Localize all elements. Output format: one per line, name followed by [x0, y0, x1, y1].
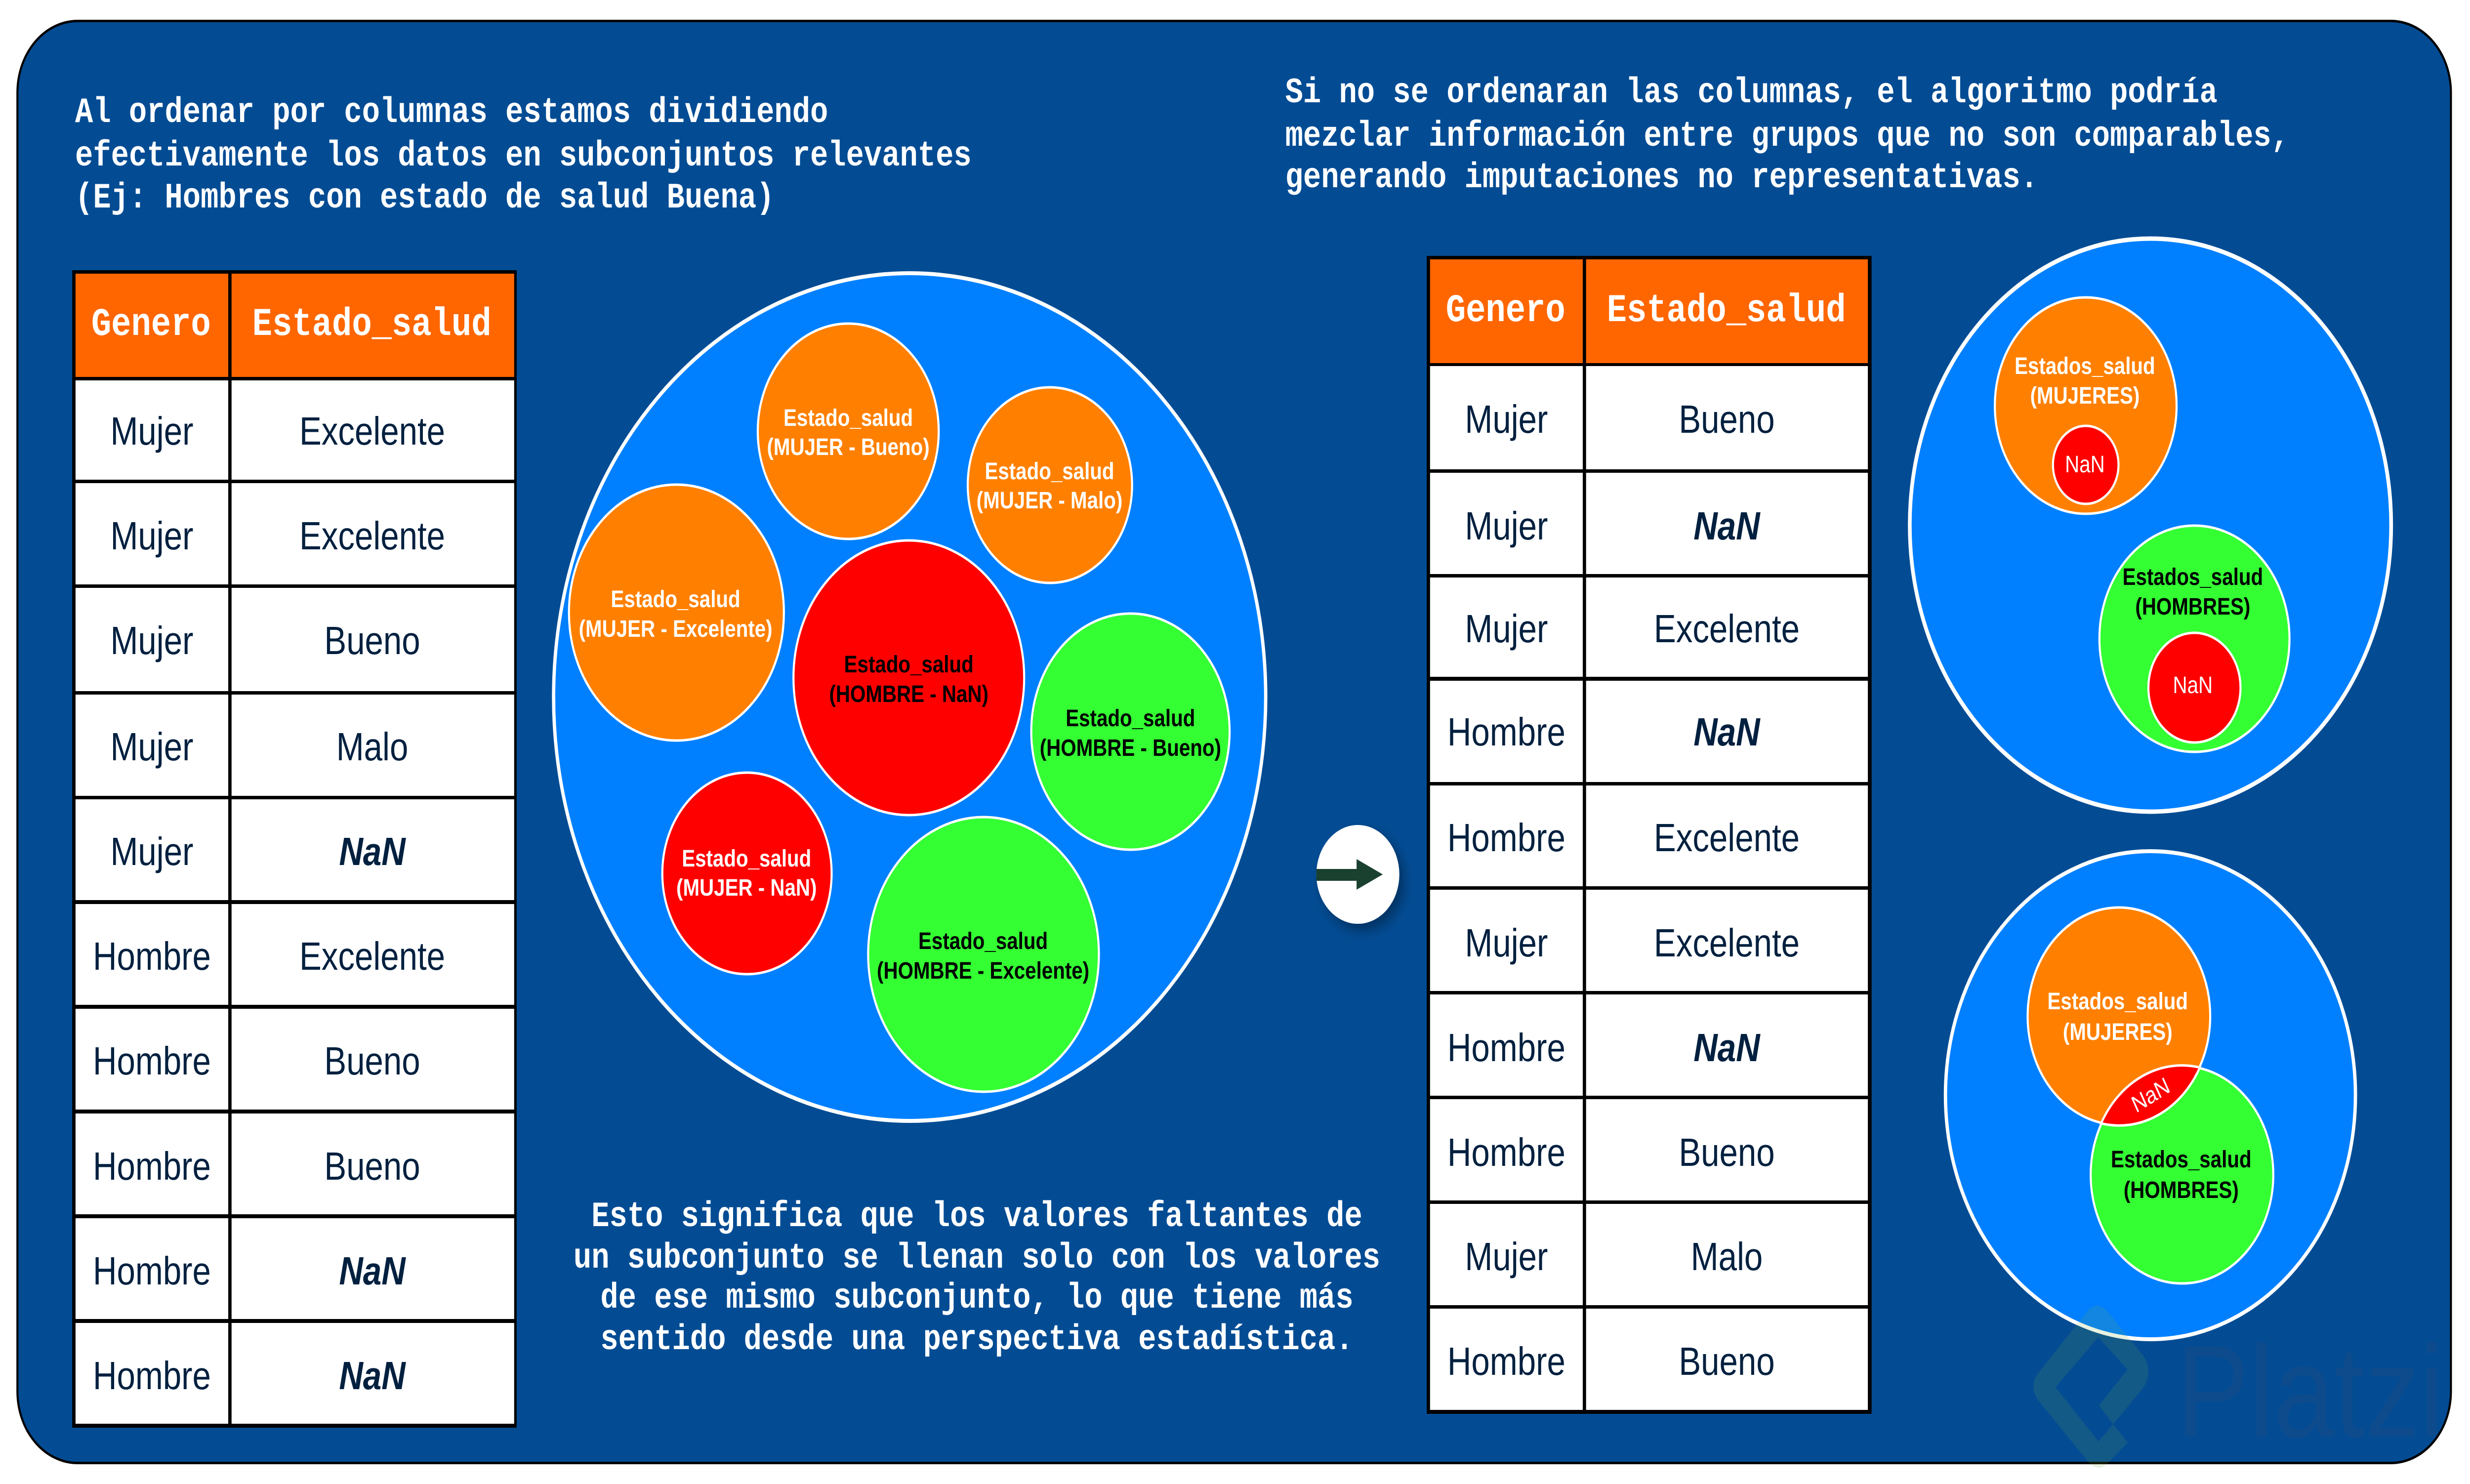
- row 3: [76, 588, 514, 691]
- subset: HOMBRE Excelente: Estado_salud: [918, 928, 1048, 954]
- row 1: [1430, 366, 1868, 469]
- row 10: [76, 1323, 514, 1424]
- row 2: [1430, 473, 1868, 574]
- subset: MUJER Excelente: Estado_salud: [611, 586, 741, 613]
- table header: unsorted: Genero: [1446, 289, 1565, 333]
- row 7: [1430, 994, 1868, 1096]
- table header: sorted: [76, 274, 514, 377]
- row 9: Hombre: [93, 1248, 211, 1293]
- subset: MUJER Excelente: (MUJER - Excelente): [579, 616, 773, 642]
- NaN intersection: NaN: [2128, 1072, 2174, 1118]
- text: right intro paragraph: generando imputaciones no representativas.: [1285, 158, 2038, 198]
- row 5: Hombre: [1447, 815, 1565, 860]
- row 5: NaN: [339, 829, 406, 873]
- subset: HOMBRE Bueno: Estado_salud: [1066, 705, 1195, 732]
- row 10: Hombre: [1447, 1339, 1565, 1383]
- row 1: Mujer: [1465, 397, 1548, 441]
- row 6: Hombre: [93, 934, 211, 978]
- row 4: NaN: [1693, 709, 1761, 754]
- subset: HOMBRE NaN: Estado_salud: [844, 652, 974, 678]
- NaN subset: hombres: NaN: [2173, 672, 2213, 699]
- table header: sorted: Genero: [91, 303, 211, 347]
- row 1: Mujer: [110, 409, 193, 453]
- group: hombres: [2091, 1066, 2273, 1283]
- text: right intro paragraph: mezclar información entre grupos que no son comparables,: [1285, 116, 2289, 157]
- text: left intro paragraph: efectivamente los datos en subconjuntos relevantes: [75, 136, 972, 176]
- group: hombres: (HOMBRES): [2135, 594, 2250, 620]
- row 7: Hombre: [93, 1038, 211, 1083]
- row 2: Mujer: [1465, 503, 1548, 548]
- row 1: Excelente: [299, 409, 445, 453]
- row 2: NaN: [1693, 503, 1761, 548]
- row 6: Excelente: [299, 934, 445, 978]
- subset: MUJER Bueno: Estado_salud: [783, 405, 913, 431]
- subset: HOMBRE Bueno: [1031, 614, 1230, 850]
- row 9: Malo: [1691, 1234, 1763, 1278]
- NaN subset: hombres: [2148, 633, 2240, 742]
- text: explanation below diagram: sentido desde una perspectiva estadística.: [600, 1319, 1354, 1360]
- row 8: Bueno: [1679, 1130, 1775, 1174]
- row 10: NaN: [339, 1353, 406, 1398]
- row 5: Mujer: [110, 829, 193, 873]
- row 6: Mujer: [1465, 920, 1548, 965]
- table: sorted data: [72, 270, 517, 1428]
- row 4: [1430, 681, 1868, 782]
- row 9: [76, 1218, 514, 1319]
- row 9: NaN: [339, 1248, 406, 1293]
- text: explanation below diagram: Esto significa que los valores faltantes de: [591, 1196, 1362, 1237]
- subset: MUJER Malo: Estado_salud: [985, 458, 1114, 485]
- NaN intersection: [2101, 1066, 2200, 1125]
- row 3: Bueno: [324, 618, 420, 662]
- row 8: Hombre: [1447, 1130, 1565, 1174]
- subset: HOMBRE NaN: [793, 540, 1024, 815]
- row 1: [76, 380, 514, 480]
- subset: HOMBRE NaN: (HOMBRE - NaN): [829, 681, 988, 707]
- row 9: Mujer: [1465, 1234, 1548, 1278]
- text: explanation below diagram: [574, 1196, 1380, 1360]
- group: mujeres: [2028, 907, 2210, 1125]
- subset: MUJER Excelente: [569, 485, 784, 741]
- row 6: Excelente: [1654, 920, 1800, 965]
- NaN subset: mujeres: [2053, 426, 2118, 504]
- group: mujeres: Estados_salud: [2048, 989, 2188, 1015]
- row 3: Mujer: [1465, 606, 1548, 651]
- text: left intro paragraph: (Ej: Hombres con estado de salud Buena): [75, 178, 774, 218]
- subset: MUJER NaN: Estado_salud: [682, 846, 811, 872]
- row 7: Hombre: [1447, 1025, 1565, 1070]
- table header: unsorted: Estado_salud: [1607, 289, 1846, 333]
- row 3: [1430, 577, 1868, 677]
- row 3: Mujer: [110, 618, 193, 662]
- subset: HOMBRE Excelente: (HOMBRE - Excelente): [877, 958, 1089, 984]
- diagram: separated groups with own NaN: [1910, 239, 2391, 812]
- row 10: Bueno: [1679, 1339, 1775, 1383]
- group: hombres: (HOMBRES): [2124, 1177, 2239, 1203]
- text: explanation below diagram: de ese mismo subconjunto, lo que tiene más: [600, 1278, 1354, 1319]
- row 7: Bueno: [324, 1038, 420, 1083]
- NaN subset: mujeres: NaN: [2065, 452, 2105, 478]
- row 8: [76, 1113, 514, 1214]
- table: unsorted data: [1427, 256, 1872, 1414]
- watermark: Platzi: Platzi: [2176, 1319, 2444, 1464]
- subset: MUJER Bueno: [758, 324, 939, 539]
- group: mujeres: [1995, 297, 2177, 514]
- subset: MUJER Malo: (MUJER - Malo): [977, 488, 1122, 514]
- row 2: [76, 483, 514, 584]
- row 4: Malo: [336, 724, 408, 769]
- diagram: mixed groups with shared NaN: [1945, 851, 2355, 1339]
- row 1: Bueno: [1679, 397, 1775, 441]
- row 5: Excelente: [1654, 815, 1800, 860]
- row 2: Mujer: [110, 513, 193, 558]
- row 3: Excelente: [1654, 606, 1800, 651]
- diagram: subsets by gender and health status: [554, 273, 1266, 1121]
- row 5: [1430, 785, 1868, 886]
- row 4: [76, 695, 514, 796]
- group: hombres: [2100, 526, 2290, 752]
- text: explanation below diagram: un subconjunto se llenan solo con los valores: [574, 1238, 1380, 1278]
- subset: MUJER Bueno: (MUJER - Bueno): [767, 434, 930, 460]
- subset: MUJER Malo: [968, 387, 1132, 583]
- row 8: [1430, 1099, 1868, 1200]
- subset: MUJER NaN: (MUJER - NaN): [676, 875, 817, 901]
- group: mujeres: Estados_salud: [2015, 353, 2155, 379]
- icon: arrow in white circle: [1317, 825, 1400, 924]
- table header: sorted: Estado_salud: [252, 303, 492, 347]
- subset: MUJER NaN: [662, 773, 831, 974]
- row 2: Excelente: [299, 513, 445, 558]
- group: mujeres: (MUJERES): [2063, 1019, 2173, 1045]
- subset: HOMBRE Bueno: (HOMBRE - Bueno): [1040, 735, 1221, 761]
- row 4: Mujer: [110, 724, 193, 769]
- row 9: [1430, 1204, 1868, 1305]
- text: left intro paragraph: [75, 92, 972, 218]
- row 4: Hombre: [1447, 709, 1565, 754]
- group: mujeres: (MUJERES): [2030, 383, 2140, 409]
- row 7: [76, 1009, 514, 1110]
- row 5: [76, 799, 514, 900]
- subset: HOMBRE Excelente: [868, 817, 1099, 1092]
- table header: unsorted: [1430, 259, 1868, 363]
- row 7: NaN: [1693, 1025, 1761, 1070]
- group: hombres: Estados_salud: [2123, 564, 2263, 590]
- group: hombres: Estados_salud: [2111, 1147, 2252, 1173]
- row 6: [1430, 890, 1868, 991]
- row 10: Hombre: [93, 1353, 211, 1398]
- text: left intro paragraph: Al ordenar por columnas estamos dividiendo: [75, 92, 828, 133]
- text: right intro paragraph: [1285, 73, 2289, 198]
- row 6: [76, 904, 514, 1005]
- row 8: Bueno: [324, 1144, 420, 1188]
- row 10: [1430, 1309, 1868, 1410]
- watermark: Platzi: [2033, 1306, 2444, 1468]
- row 8: Hombre: [93, 1144, 211, 1188]
- text: right intro paragraph: Si no se ordenaran las columnas, el algoritmo podría: [1285, 73, 2218, 113]
